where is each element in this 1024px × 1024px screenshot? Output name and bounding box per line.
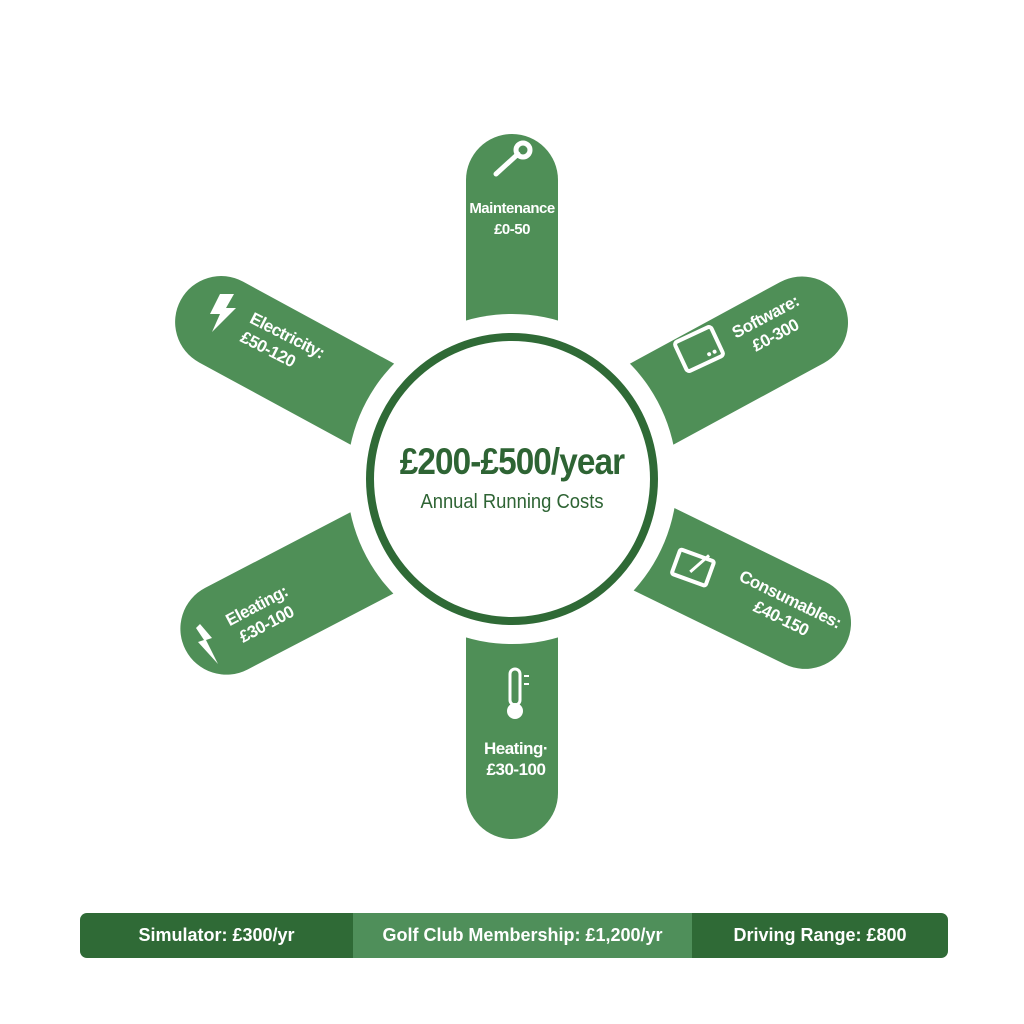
segment: driving range: Driving Range: £800 bbox=[733, 925, 907, 945]
center circle bbox=[366, 333, 658, 625]
label: electricity: Electricity: bbox=[247, 309, 328, 362]
spoke: consumables bbox=[492, 439, 867, 684]
comparison bar bbox=[80, 913, 948, 958]
label: software: Software: bbox=[729, 291, 802, 342]
spoke: software bbox=[490, 260, 864, 520]
segment: driving range bbox=[692, 913, 948, 958]
label: eleating: £30-100 bbox=[236, 602, 297, 646]
segment: golf club: Golf Club Membership: £1,200/yr bbox=[382, 925, 663, 945]
label: eleating bbox=[223, 582, 297, 646]
segment: simulator: Simulator: £300/yr bbox=[138, 925, 295, 945]
icon: wrench bbox=[494, 140, 532, 176]
spoke: maintenance bbox=[466, 134, 558, 480]
label: maintenance bbox=[469, 200, 555, 238]
spoke: heating bottom bbox=[466, 480, 558, 839]
label: heating: Heating· bbox=[484, 739, 548, 758]
label: eleating: Eleating: bbox=[223, 582, 291, 630]
center mask bbox=[347, 314, 677, 644]
label: maintenance: Maintenance bbox=[469, 200, 555, 217]
icon: tablet software bbox=[673, 325, 725, 373]
subtitle: Annual Running Costs bbox=[420, 491, 604, 513]
label: heating bbox=[484, 739, 548, 779]
label: consumables: Consumables: bbox=[736, 567, 844, 632]
label: maintenance: £0-50 bbox=[494, 221, 530, 238]
segment: simulator bbox=[80, 913, 353, 958]
label: software: £0-300 bbox=[749, 315, 802, 355]
label: electricity: £50-120 bbox=[237, 328, 298, 371]
icon: lightning eleating bbox=[196, 624, 218, 664]
icon: monitor consumables bbox=[670, 548, 716, 588]
spoke: electricity bbox=[159, 260, 534, 520]
headline: £200-£500/year bbox=[400, 441, 624, 482]
icon: lightning electricity bbox=[210, 294, 236, 332]
label: heating: £30-100 bbox=[487, 760, 545, 779]
label: consumables: £40-150 bbox=[750, 597, 812, 640]
icon: thermometer bbox=[507, 668, 529, 719]
spoke: eleating bbox=[164, 439, 533, 691]
segment: golf club bbox=[353, 913, 692, 958]
